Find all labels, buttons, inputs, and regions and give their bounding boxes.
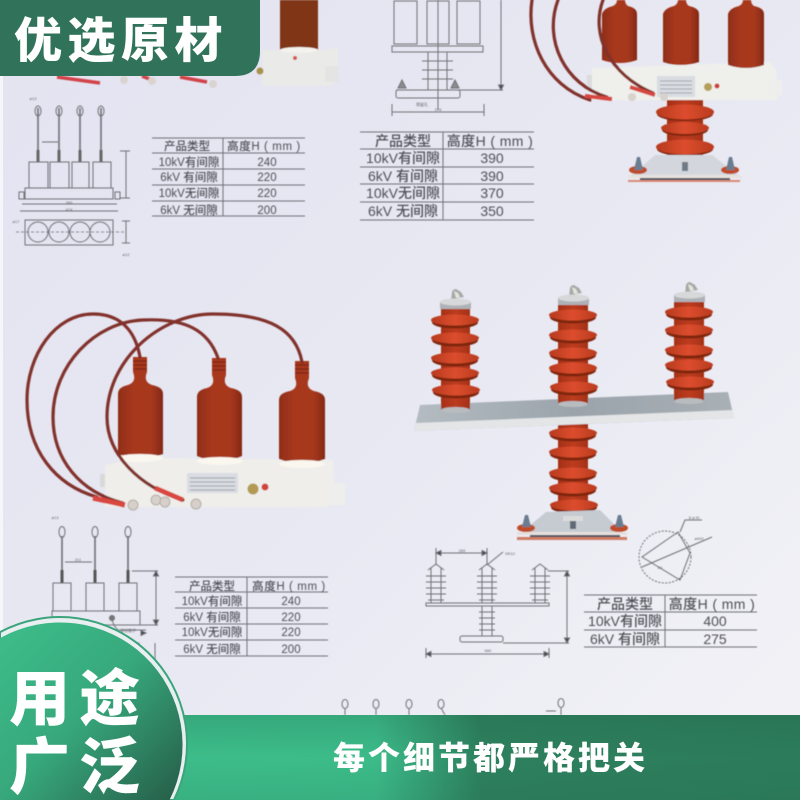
table: four-phase heights: 6kV 有间隙 xyxy=(160,170,218,184)
table: three-phase on post heights: 6kV 有间隙 xyxy=(368,168,438,184)
table: three-phase on post heights xyxy=(360,132,534,220)
white base box xyxy=(105,458,335,507)
table: T-bracket arrester heights: 400 xyxy=(703,613,727,629)
product photo: T-bracket arrester xyxy=(414,282,734,540)
diagram: four-phase arrester dimensions: ø17 xyxy=(13,219,20,224)
diagram: three-phase on post, top centre: 378 xyxy=(435,107,442,112)
diagram: four-phase arrester dimensions: ø13 xyxy=(30,96,37,101)
table: T-bracket arrester heights: 275 xyxy=(703,631,727,647)
base plate xyxy=(522,510,622,532)
post insulator xyxy=(656,96,714,162)
table: four-phase heights: 6kV 无间隙 xyxy=(160,203,218,217)
product photo: top-left arrester fragment xyxy=(57,0,339,88)
table: four-phase heights: 10kV有间隙 xyxy=(159,155,220,169)
table: four-phase heights: 产品类型 xyxy=(164,139,210,153)
table: three-phase arrester heights: 220 xyxy=(281,612,301,624)
diagram fragment: heads above footer bar xyxy=(342,698,564,715)
table: four-phase heights: 220 xyxy=(257,172,277,184)
product photo: three-phase arrester with cables xyxy=(27,314,345,510)
left cylinder xyxy=(118,357,163,458)
table: four-phase heights: 220 xyxy=(257,188,277,200)
table: three-phase on post heights: 10kV有间隙 xyxy=(366,150,440,166)
diagram: mounting plate plan view: ø400 xyxy=(694,536,704,541)
earth knob and lamp xyxy=(248,484,258,494)
product photo: top-right arrester on post xyxy=(531,0,782,182)
diagram: T-bracket arrester dimensions: 289 xyxy=(459,548,466,553)
diagram: T-bracket arrester dimensions: SR12 xyxy=(505,551,516,556)
table: three-phase on post heights: 产品类型 xyxy=(375,133,431,149)
diagram: T-bracket arrester dimensions xyxy=(426,548,570,658)
lower insulator xyxy=(549,422,598,516)
table: T-bracket arrester heights: 6kV 有间隙 xyxy=(590,631,660,647)
table: four-phase heights: 10kV无间隙 xyxy=(159,186,220,200)
diagram: four-phase arrester dimensions: ø12 xyxy=(123,252,130,257)
diagram: three-phase arrester dimensions: 311 xyxy=(75,557,82,562)
table: three-phase arrester heights: 200 xyxy=(281,644,301,656)
table: three-phase on post heights: 370 xyxy=(480,185,504,201)
diagram: four-phase arrester dimensions: 380 xyxy=(66,200,73,205)
table: four-phase heights xyxy=(152,138,305,217)
banner: 优选原材 xyxy=(0,0,260,76)
diagram: T-bracket arrester dimensions: 680 xyxy=(485,648,492,653)
diagram: three-phase on post, top centre: 预留孔 xyxy=(416,101,428,107)
table: three-phase on post heights: 390 xyxy=(480,168,504,184)
diagram: three-phase arrester dimensions xyxy=(52,515,158,665)
table: three-phase arrester heights: 6kV 有间隙 xyxy=(183,610,241,624)
diagram: three-phase on post, top centre xyxy=(392,0,504,116)
table: three-phase on post heights: 10kV无间隙 xyxy=(366,185,440,201)
middle cylinder xyxy=(197,358,242,461)
badge: 用途广泛: 用途 xyxy=(9,665,149,733)
table: three-phase arrester heights: 10kV无间隙 xyxy=(182,625,243,639)
table: T-bracket arrester heights: 10kV有间隙 xyxy=(588,613,662,629)
banner: 优选原材: 优选原材 xyxy=(14,15,228,68)
table: three-phase on post heights: 350 xyxy=(480,203,504,219)
table: three-phase on post heights: 6kV 无间隙 xyxy=(368,203,438,219)
diagram: mounting plate plan view: 8-ø M xyxy=(689,515,699,520)
white base box xyxy=(590,62,778,100)
table: three-phase arrester heights: 220 xyxy=(281,627,301,639)
table: T-bracket arrester heights xyxy=(584,595,757,647)
table: four-phase heights: 240 xyxy=(257,157,277,169)
table: three-phase arrester heights: 240 xyxy=(281,596,301,608)
footer bar xyxy=(0,715,800,800)
table: three-phase arrester heights: 产品类型 xyxy=(189,579,235,593)
cables xyxy=(107,314,302,500)
table: T-bracket arrester heights: 高度H ( mm ) xyxy=(669,596,755,612)
diagram: three-phase arrester dimensions: 接地端子 xyxy=(120,627,136,633)
diagram: mounting plate plan view: 60 xyxy=(658,565,663,570)
badge: 用途广泛: 广泛 xyxy=(9,733,149,800)
badge: 用途广泛 xyxy=(0,617,187,800)
footer slogan: 每个细节都严格把关 xyxy=(333,740,648,776)
steel crossbar xyxy=(414,392,734,431)
table: three-phase arrester heights xyxy=(175,577,328,656)
right insulator xyxy=(665,282,714,404)
left insulator xyxy=(431,289,480,413)
table: three-phase arrester heights: 高度H ( mm ) xyxy=(252,579,326,593)
right cylinder xyxy=(279,361,325,464)
diagram: four-phase arrester dimensions: 474 xyxy=(66,207,73,212)
nameplate xyxy=(187,473,238,493)
middle insulator xyxy=(549,285,598,407)
table: three-phase on post heights: 高度H ( mm ) xyxy=(447,133,533,149)
diagram: four-phase arrester dimensions xyxy=(13,96,130,257)
table: four-phase heights: 200 xyxy=(257,205,277,217)
table: three-phase arrester heights: 6kV 无间隙 xyxy=(183,642,241,656)
diagram: mounting plate plan view xyxy=(639,515,712,583)
table: T-bracket arrester heights: 产品类型 xyxy=(597,596,653,612)
table: four-phase heights: 高度H ( mm ) xyxy=(227,139,301,153)
cylinders xyxy=(602,0,637,63)
table: three-phase on post heights: 390 xyxy=(480,150,504,166)
table: three-phase arrester heights: 10kV有间隙 xyxy=(182,594,243,608)
red sleeves and lugs xyxy=(93,488,183,505)
diagram: three-phase arrester dimensions: ø13 xyxy=(52,515,59,520)
